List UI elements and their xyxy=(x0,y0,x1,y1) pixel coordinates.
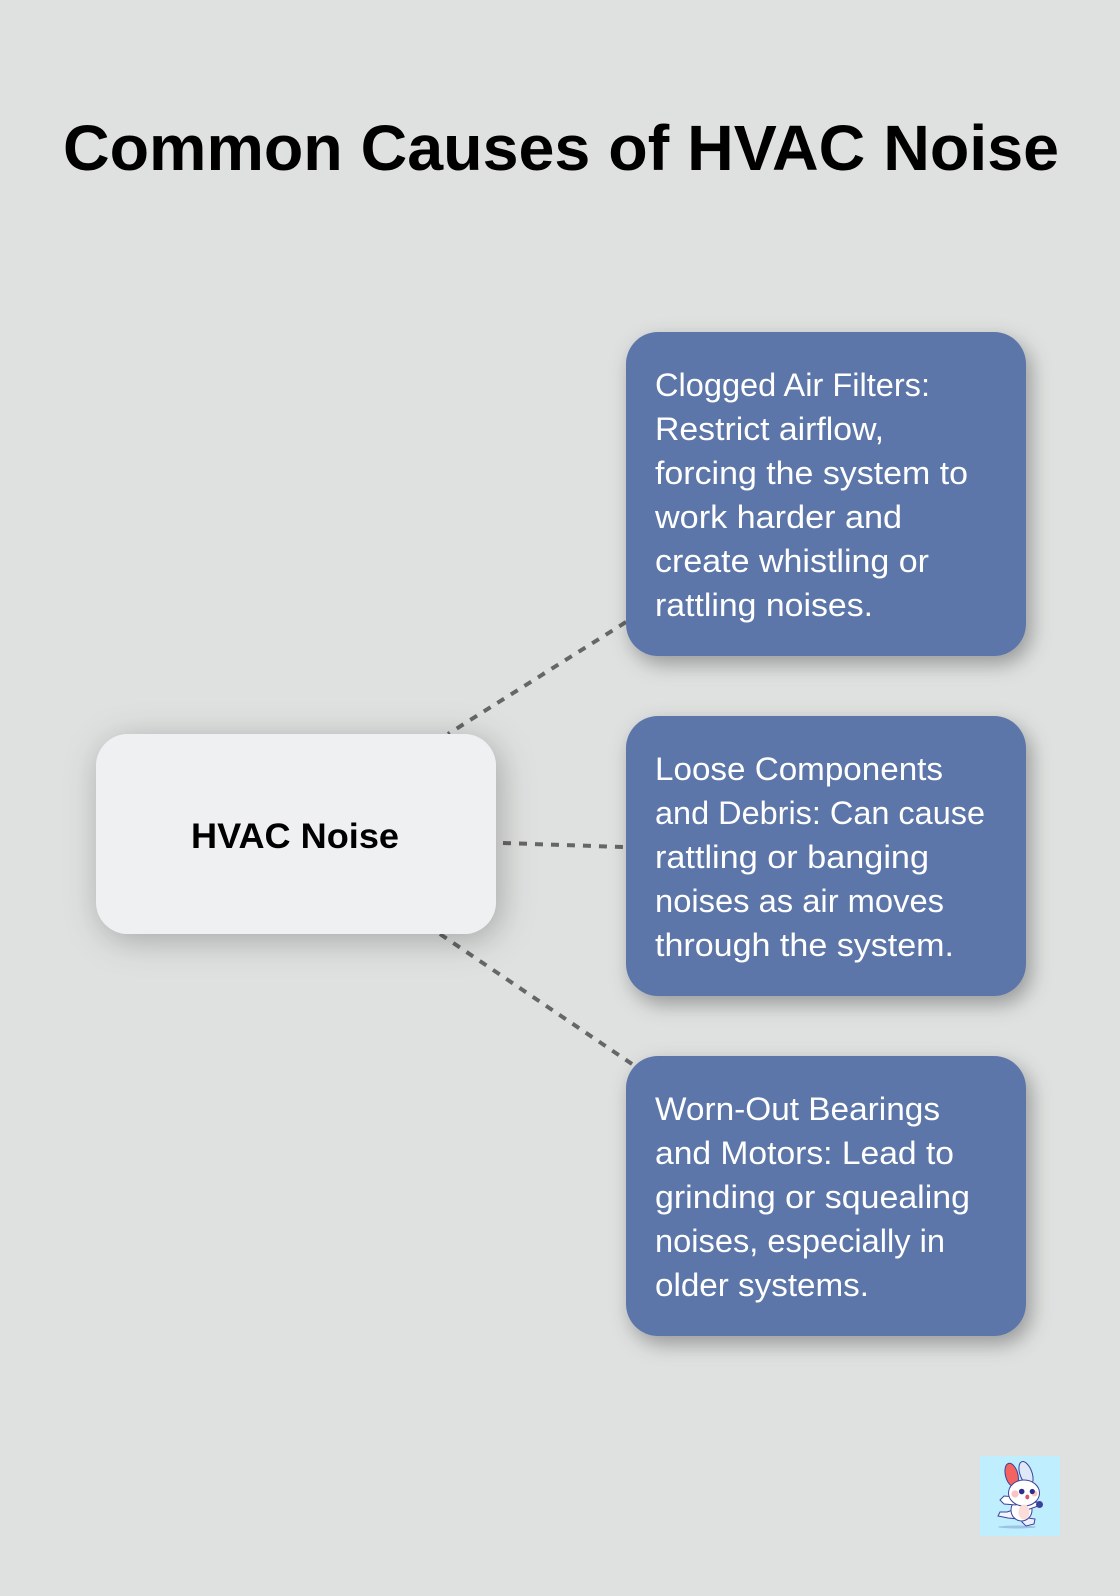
text: Worn-Out Bearings and Motors: and Motors: Lead to xyxy=(655,1135,954,1171)
connector: HVAC Noise to Worn-Out Bearings xyxy=(440,934,632,1064)
icon: running rabbit logo xyxy=(980,1456,1060,1536)
text: Clogged Air Filters: rattling noises. xyxy=(655,587,873,623)
text: Worn-Out Bearings and Motors: noises, especially in xyxy=(655,1223,945,1259)
panel: HVAC Noise central node xyxy=(96,734,496,934)
text: Clogged Air Filters: create whistling or xyxy=(655,543,929,579)
text: Clogged Air Filters: Clogged Air Filters: xyxy=(655,367,930,403)
text: Clogged Air Filters: Restrict airflow, xyxy=(655,411,884,447)
text: Worn-Out Bearings and Motors xyxy=(655,1091,970,1303)
text: Worn-Out Bearings and Motors: grinding or squealing xyxy=(655,1179,970,1215)
text: Loose Components and Debris xyxy=(655,751,985,963)
panel: Worn-Out Bearings and Motors xyxy=(626,1056,1026,1336)
text: Loose Components and Debris: and Debris: Can cause xyxy=(655,795,985,831)
text: Clogged Air Filters xyxy=(654,367,968,623)
text: Loose Components and Debris: noises as air moves xyxy=(655,883,944,919)
connector: HVAC Noise to Clogged Air Filters xyxy=(448,622,626,734)
panel: Clogged Air Filters xyxy=(626,332,1026,656)
title: Common Causes of HVAC Noise xyxy=(63,112,1059,184)
text: Clogged Air Filters: forcing the system to xyxy=(655,455,968,491)
text: Loose Components and Debris: Loose Components xyxy=(655,751,943,787)
text: Loose Components and Debris: through the system. xyxy=(655,927,954,963)
text: Clogged Air Filters: work harder and xyxy=(654,499,902,535)
text: Worn-Out Bearings and Motors: Worn-Out Bearings xyxy=(655,1091,940,1127)
text: Worn-Out Bearings and Motors: older systems. xyxy=(655,1267,869,1303)
connector: HVAC Noise to Loose Components xyxy=(503,843,623,847)
panel: Loose Components and Debris xyxy=(626,716,1026,996)
central node label: HVAC Noise xyxy=(191,817,399,856)
text: Loose Components and Debris: rattling or banging xyxy=(655,839,929,875)
